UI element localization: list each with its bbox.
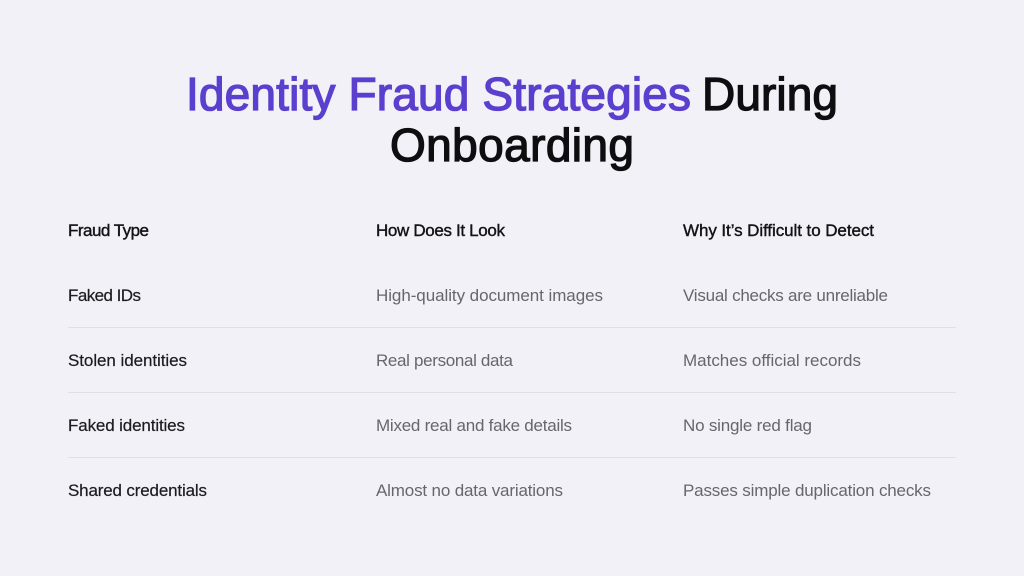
row: shared credentials: Passes simple duplication checks bbox=[683, 481, 931, 500]
row: stolen identities bbox=[68, 351, 861, 370]
row: faked identities: Mixed real and fake details bbox=[376, 416, 572, 435]
table: fraud strategies bbox=[68, 221, 956, 500]
table header row: Why It’s Difficult to Detect bbox=[683, 221, 874, 240]
table header row: Fraud Type bbox=[68, 221, 149, 240]
title bbox=[186, 68, 838, 171]
row: faked identities: Faked identities bbox=[68, 416, 185, 435]
table header row bbox=[68, 221, 874, 240]
title: Identity Fraud Strategies bbox=[186, 68, 691, 120]
title: Onboarding bbox=[390, 119, 634, 171]
row: faked identities: No single red flag bbox=[683, 416, 812, 435]
row: faked IDs: High-quality document images bbox=[376, 286, 603, 305]
row: shared credentials bbox=[68, 481, 931, 500]
row: stolen identities: Matches official records bbox=[683, 351, 861, 370]
row: faked IDs: Faked IDs bbox=[68, 286, 141, 305]
row: shared credentials: Shared credentials bbox=[68, 481, 207, 500]
row: faked IDs: Visual checks are unreliable bbox=[683, 286, 888, 305]
title: During bbox=[702, 68, 838, 120]
row: stolen identities: Real personal data bbox=[376, 351, 514, 370]
row: faked IDs bbox=[68, 286, 888, 305]
row: stolen identities: Stolen identities bbox=[68, 351, 187, 370]
table header row: How Does It Look bbox=[376, 221, 506, 240]
row: shared credentials: Almost no data variations bbox=[376, 481, 563, 500]
row: faked identities bbox=[68, 416, 812, 435]
